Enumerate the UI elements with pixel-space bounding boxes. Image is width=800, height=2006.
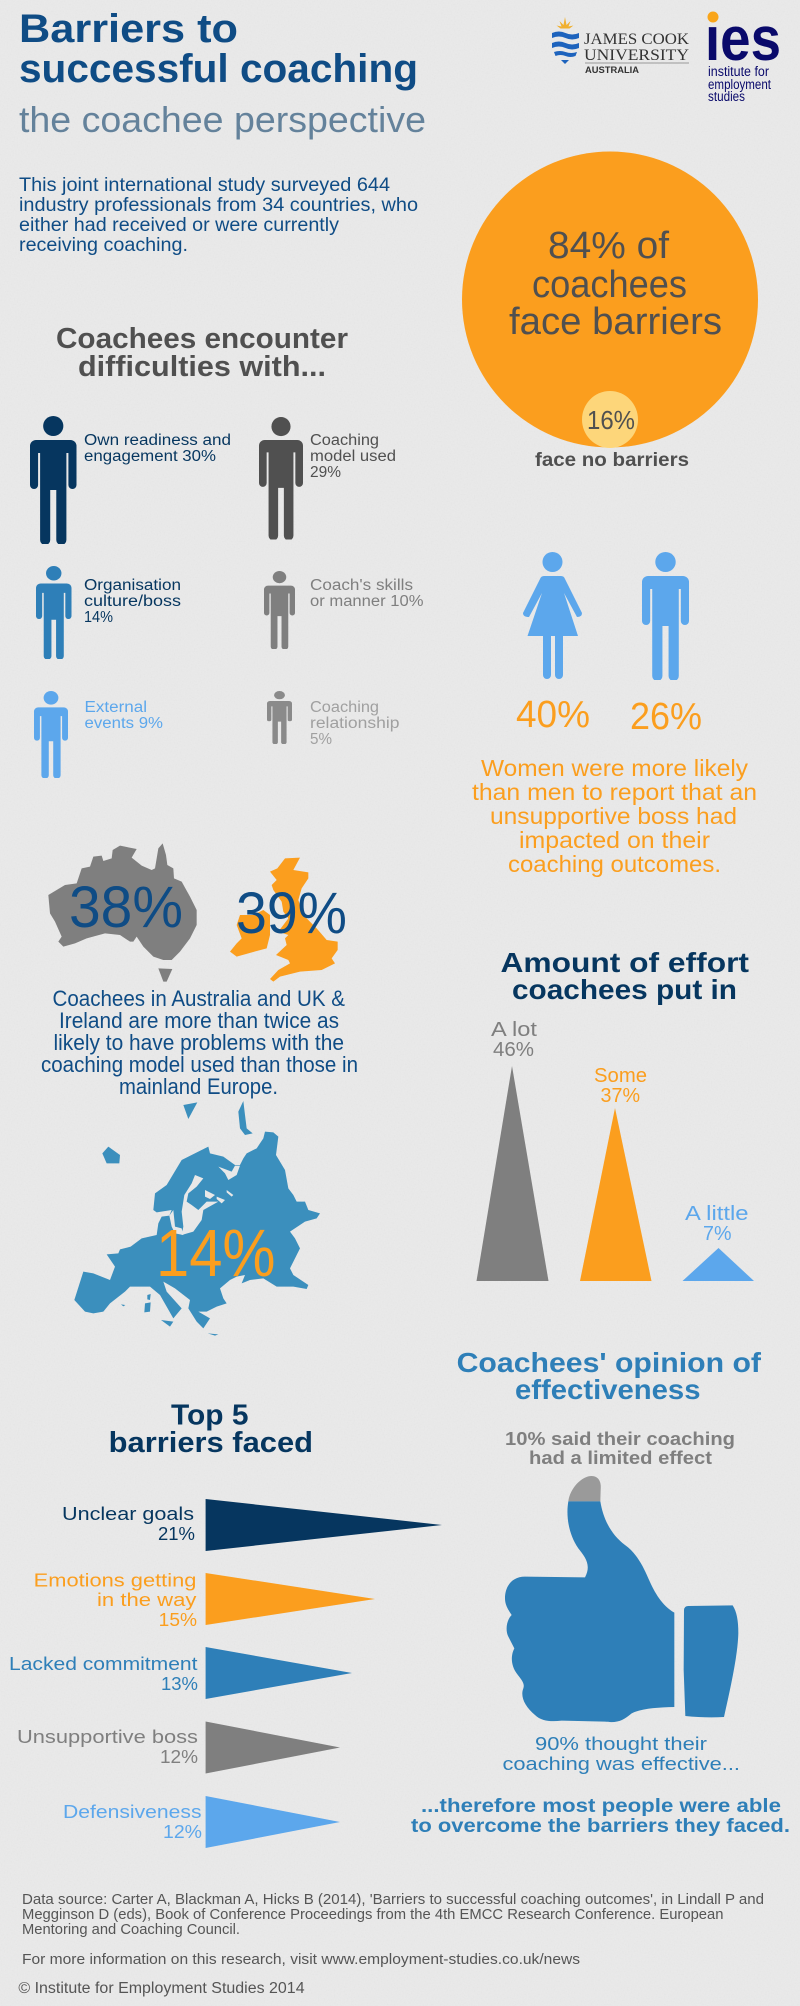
- men 26%: 26%: [630, 696, 702, 738]
- barrier: emotions: in the way: [97, 1589, 197, 1610]
- footer: data source: Megginson D (eds), Book of Conference Proceedings from the 4th EMCC Research Conference. European: [22, 1907, 724, 1923]
- heading: effort: coachees put in: [512, 974, 737, 1005]
- UK 39%: 39%: [236, 881, 347, 946]
- icon: woman: [523, 552, 582, 679]
- barrier: lacked commitment: Lacked commitment: [9, 1653, 198, 1674]
- figure: coaching model 29%: model used: [310, 448, 396, 465]
- barrier: unclear goals: Unclear goals: [62, 1503, 194, 1524]
- text: women more likely: coaching outcomes.: [508, 851, 721, 877]
- bar: some 37%: [580, 1065, 652, 1281]
- heading: effort: [500, 947, 749, 1005]
- barrier: emotions: 15%: [159, 1609, 197, 1630]
- figure: organisation culture 14%: Organisation: [84, 577, 181, 594]
- logo: James Cook University: UNIVERSITY: [584, 47, 689, 64]
- bar: a little 7%: [682, 1203, 754, 1281]
- text: overcome the barriers: [411, 1795, 790, 1837]
- figure: own readiness 30%: engagement 30%: [84, 448, 216, 465]
- intro text: This joint international study surveyed 644: [19, 175, 390, 196]
- bar: a little 7%: A little: [685, 1203, 748, 1225]
- figure: own readiness 30%: [30, 416, 231, 545]
- heading: difficulties: [56, 323, 348, 383]
- figure: organisation culture 14%: culture/boss: [84, 593, 181, 610]
- bar: some 37%: Some: [594, 1065, 647, 1087]
- bar: a lot 46%: 46%: [493, 1039, 534, 1061]
- Australia 38%: 38%: [69, 875, 183, 940]
- figure: organisation culture 14%: [36, 566, 181, 660]
- logo: James Cook University: JAMES COOK: [584, 31, 689, 48]
- figure: coach skills 10%: Coach's skills: [310, 577, 413, 594]
- heading: opinion of effectiveness: [457, 1347, 762, 1405]
- figure: coaching relationship 5%: Coaching: [310, 699, 379, 716]
- heading: top 5: [109, 1400, 313, 1459]
- circle headline: [509, 225, 722, 343]
- barrier: defensiveness: 12%: [163, 1821, 202, 1842]
- map: Europe: [74, 1101, 320, 1336]
- map: Australia: [48, 843, 197, 982]
- text: Australia and UK comparison: Coachees in Australia and UK &: [52, 986, 345, 1011]
- figure: coaching relationship 5%: relationship: [310, 715, 400, 732]
- footer: data source: Mentoring and Coaching Council.: [22, 1922, 240, 1938]
- map: UK and Ireland: [230, 858, 338, 982]
- logo: Institute for Employment Studies: ies: [705, 5, 781, 74]
- figure: organisation culture 14%: 14%: [84, 609, 113, 626]
- heading: top 5: barriers faced: [109, 1427, 313, 1459]
- subtitle: the coachee perspective: [19, 99, 426, 140]
- text: Australia and UK comparison: Ireland are more than twice as: [59, 1008, 339, 1033]
- figure: external events 9%: events 9%: [84, 715, 163, 732]
- text: 90% effective: coaching was effective...: [502, 1753, 740, 1774]
- circle headline: coachees: [532, 264, 687, 306]
- intro text: either had received or were currently: [19, 215, 340, 236]
- barrier: unsupportive boss: [17, 1722, 340, 1774]
- circle headline: 84% of: [548, 225, 669, 267]
- logo: Institute for Employment Studies: studies: [708, 89, 745, 104]
- logo: Institute for Employment Studies: employment: [708, 77, 771, 92]
- logo: James Cook University: AUSTRALIA: [585, 65, 639, 76]
- figure: external events 9%: [34, 691, 163, 779]
- figure: coaching relationship 5%: [267, 691, 400, 748]
- bar: a lot 46%: [476, 1019, 548, 1281]
- text: women more likely: [472, 755, 757, 877]
- face no barriers label: face no barriers: [535, 449, 689, 471]
- footer: data source: [22, 1892, 764, 1938]
- chart: effort triangles: [476, 1019, 754, 1281]
- 16% circle: 16%: [587, 405, 635, 435]
- barrier: unsupportive boss: Unsupportive boss: [17, 1726, 198, 1747]
- heading: opinion of effectiveness: Coachees' opinion of: [457, 1347, 762, 1378]
- text: Australia and UK comparison: [41, 986, 358, 1099]
- heading: difficulties: difficulties with...: [78, 351, 326, 383]
- logo: James Cook University: [552, 17, 689, 76]
- text: limited effect: 10% said their coaching: [505, 1428, 735, 1449]
- intro text: [19, 175, 418, 256]
- barrier: lacked commitment: 13%: [161, 1673, 198, 1694]
- text: Australia and UK comparison: mainland Europe.: [119, 1074, 278, 1099]
- women 40%: 40%: [516, 694, 590, 736]
- footer: more information: For more information on this research, visit www.employment-studies.co.uk/news: [22, 1952, 580, 1968]
- barrier: emotions: [34, 1569, 375, 1630]
- text: overcome the barriers: ...therefore most people were able: [421, 1795, 781, 1817]
- barrier: lacked commitment: [9, 1647, 352, 1699]
- text: women more likely: than men to report that an: [472, 779, 757, 805]
- title: Barriers to: [19, 7, 238, 51]
- barrier: unsupportive boss: 12%: [160, 1746, 198, 1767]
- figure: coaching model 29%: [259, 417, 396, 540]
- figure: external events 9%: External: [84, 699, 147, 716]
- text: women more likely: unsupportive boss had: [490, 803, 737, 829]
- text: women more likely: Women were more likely: [481, 755, 749, 781]
- text: overcome the barriers: to overcome the barriers they faced.: [411, 1815, 790, 1837]
- intro text: receiving coaching.: [19, 235, 188, 256]
- footer: copyright: © Institute for Employment Studies 2014: [18, 1980, 305, 1997]
- footer: data source: Data source: Carter A, Blackman A, Hicks B (2014), 'Barriers to successful coaching outcomes', in Lindall P and: [22, 1892, 764, 1908]
- title: [19, 7, 418, 91]
- barrier: defensiveness: Defensiveness: [63, 1801, 202, 1822]
- heading: opinion of effectiveness: effectiveness: [515, 1374, 700, 1405]
- panel: 84% circle: [462, 152, 758, 448]
- 16% circle: [582, 391, 638, 448]
- icon: man: [642, 552, 689, 681]
- text: 90% effective: 90% thought their: [535, 1733, 707, 1754]
- figure: own readiness 30%: Own readiness and: [84, 432, 231, 449]
- barrier: unclear goals: [62, 1499, 442, 1551]
- figure: coach skills 10%: [264, 571, 424, 650]
- text: 90% effective: [502, 1733, 740, 1774]
- heading: difficulties: Coachees encounter: [56, 323, 348, 355]
- icon: thumbs up: [505, 1476, 738, 1722]
- circle headline: face barriers: [509, 301, 722, 343]
- figure: coaching model 29%: Coaching: [310, 432, 379, 449]
- heading: effort: Amount of effort: [500, 947, 749, 978]
- heading: top 5: Top 5: [171, 1400, 248, 1432]
- figure: coaching relationship 5%: 5%: [310, 731, 332, 748]
- barrier: defensiveness: [63, 1796, 340, 1848]
- text: limited effect: had a limited effect: [529, 1447, 712, 1468]
- logo: Institute for Employment Studies: [708, 12, 779, 101]
- chart: top 5 barriers: [9, 1499, 442, 1848]
- intro text: industry professionals from 34 countries, who: [19, 195, 418, 216]
- text: limited effect: [505, 1428, 735, 1468]
- bar: some 37%: 37%: [600, 1085, 640, 1107]
- Europe 14%: 14%: [156, 1216, 276, 1291]
- bar: a lot 46%: A lot: [491, 1019, 538, 1041]
- logo: Institute for Employment Studies: institute for: [708, 64, 769, 79]
- figure: coaching model 29%: 29%: [310, 464, 341, 481]
- barrier: emotions: Emotions getting: [34, 1569, 196, 1590]
- figure: coach skills 10%: or manner 10%: [310, 593, 424, 610]
- text: Australia and UK comparison: likely to have problems with the: [54, 1030, 344, 1055]
- text: Australia and UK comparison: coaching model used than those in: [41, 1052, 358, 1077]
- title: successful coaching: [19, 47, 418, 91]
- barrier: unclear goals: 21%: [158, 1523, 195, 1544]
- text: women more likely: impacted on their: [519, 827, 710, 853]
- bar: a little 7%: 7%: [703, 1223, 732, 1245]
